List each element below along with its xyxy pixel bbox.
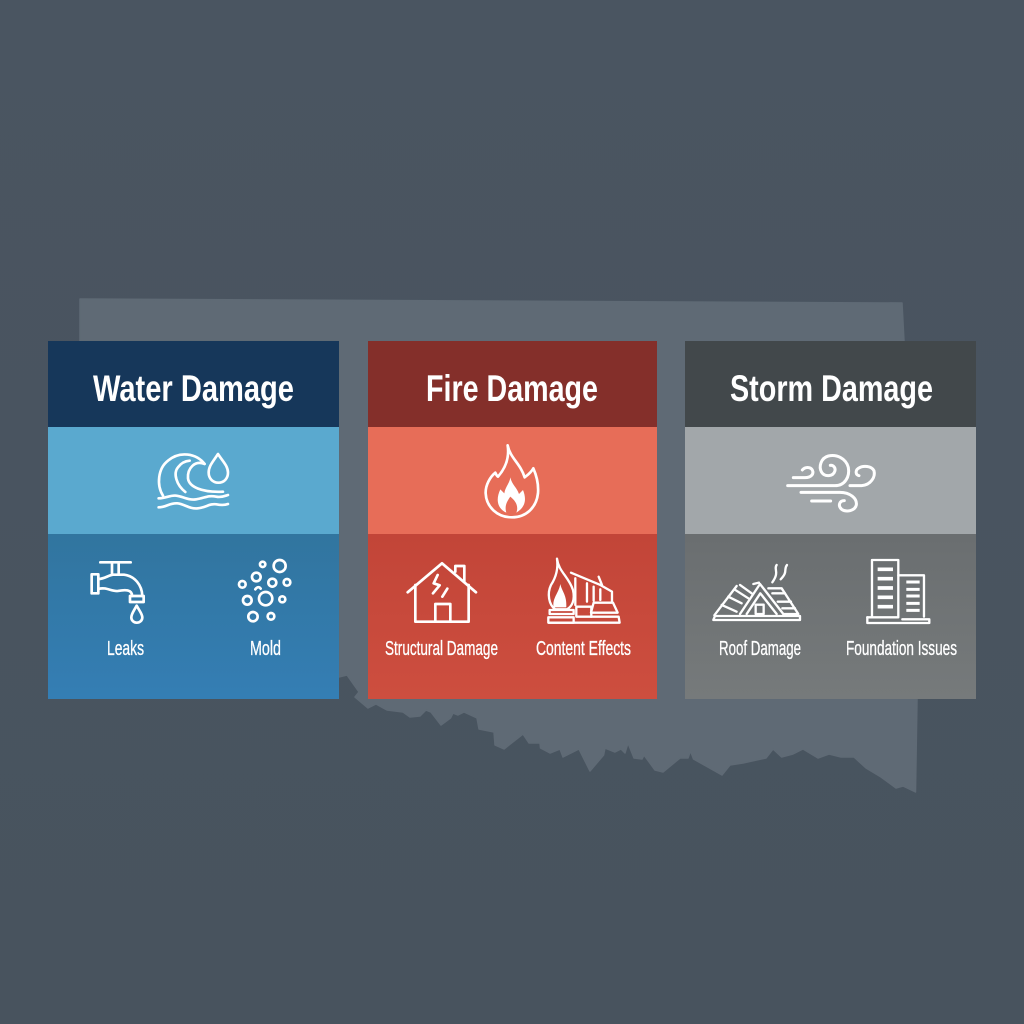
state map silhouette bbox=[80, 299, 917, 792]
water icon band bbox=[48, 427, 339, 534]
heading: storm damage: Storm Damage bbox=[730, 368, 933, 409]
icon: buildings on foundation bbox=[867, 560, 929, 623]
label: foundation issues: Foundation Issues bbox=[846, 638, 957, 660]
label: mold: Mold bbox=[250, 638, 281, 660]
label: content effects: Content Effects bbox=[536, 638, 631, 660]
icon: wave and drop bbox=[159, 454, 228, 508]
icon: leaking faucet bbox=[92, 562, 144, 623]
fire lower band bbox=[368, 534, 657, 699]
label: leaks: Leaks bbox=[107, 638, 144, 660]
icon: flame bbox=[486, 445, 538, 517]
icon: burning contents bbox=[548, 559, 620, 623]
heading: water damage: Water Damage bbox=[93, 368, 294, 409]
fire header band bbox=[368, 341, 657, 427]
water lower band bbox=[48, 534, 339, 699]
storm icon band bbox=[685, 427, 976, 534]
fire icon band bbox=[368, 427, 657, 534]
label: structural damage: Structural Damage bbox=[385, 638, 498, 660]
panel: storm damage bbox=[685, 341, 976, 699]
water header band bbox=[48, 341, 339, 427]
heading: fire damage: Fire Damage bbox=[426, 368, 598, 409]
icon: damaged roof bbox=[713, 565, 800, 620]
icon: cracked house bbox=[408, 563, 476, 622]
panel: water damage bbox=[48, 341, 339, 699]
label: roof damage: Roof Damage bbox=[719, 638, 801, 660]
icon: mold spores bbox=[239, 560, 290, 621]
icon: wind gusts bbox=[788, 456, 874, 511]
storm header band bbox=[685, 341, 976, 427]
panel: fire damage bbox=[368, 341, 657, 699]
storm lower band bbox=[685, 534, 976, 699]
